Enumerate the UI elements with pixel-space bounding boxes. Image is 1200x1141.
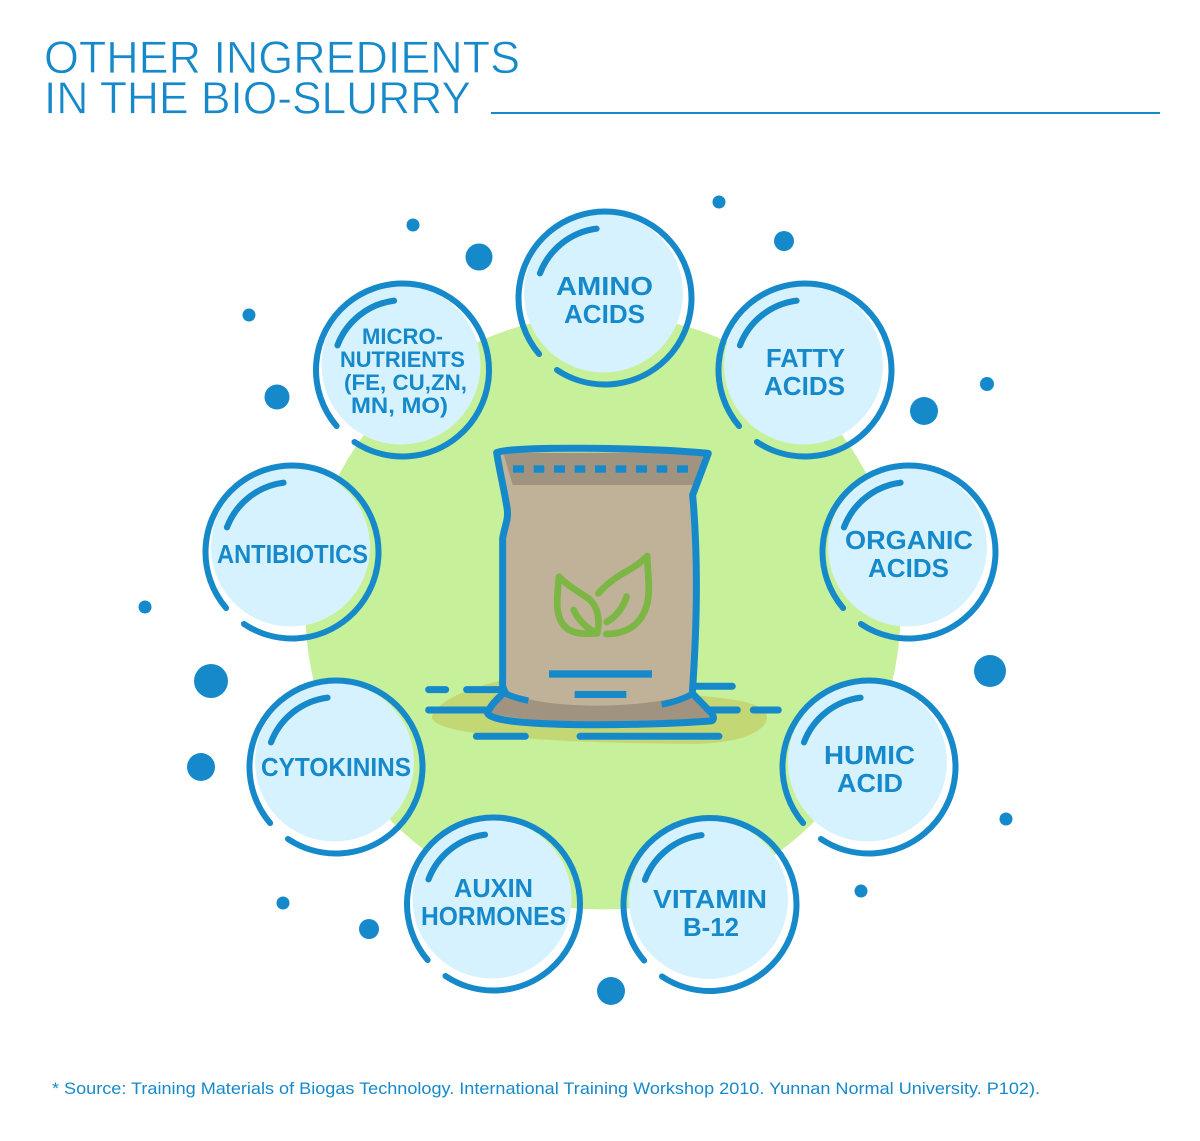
title: OTHER INGREDIENTS xyxy=(44,32,520,83)
bubble: antibiotics: ANTIBIOTICS xyxy=(217,539,368,569)
bubble: cytokinins: CYTOKININS xyxy=(261,752,411,782)
bubble: micronutrients: MN, MO) xyxy=(351,393,448,418)
bubble: vitamin b-12 xyxy=(588,783,832,1026)
bubble: amino acids xyxy=(483,176,727,420)
bag base xyxy=(488,693,712,723)
bubble: organic acids: ACIDS xyxy=(868,553,949,583)
title: IN THE BIO-SLURRY xyxy=(44,72,471,124)
bubble: auxin hormones: HORMONES xyxy=(421,901,566,931)
bubble: organic acids: ORGANIC xyxy=(845,525,973,555)
bag body xyxy=(497,453,708,706)
bubble: fatty acids: ACIDS xyxy=(764,371,845,401)
bubble: micronutrients: NUTRIENTS xyxy=(340,347,465,372)
green background circle xyxy=(306,314,900,910)
decorative dots xyxy=(138,196,1012,1005)
icon: fertilizer bag xyxy=(429,448,778,744)
bubble: vitamin b-12: B-12 xyxy=(683,912,739,942)
bubble: organic acids xyxy=(787,430,1031,674)
bubble: auxin hormones: AUXIN xyxy=(454,873,533,903)
bubble: antibiotics xyxy=(170,430,414,674)
ground shadow xyxy=(432,680,767,744)
bubble: humic acid xyxy=(747,645,991,889)
bag hem strokes xyxy=(505,693,692,705)
bag outline xyxy=(488,448,713,725)
bubble: micronutrients: MICRO- xyxy=(362,324,443,349)
bubble: vitamin b-12: VITAMIN xyxy=(653,884,767,914)
bubble: auxin hormones xyxy=(372,782,615,1026)
bubble: fatty acids xyxy=(683,248,927,492)
bag top band xyxy=(503,453,707,485)
bubble: cytokinins xyxy=(214,645,458,889)
bubble: amino acids: AMINO xyxy=(556,271,653,301)
bubble: micronutrients xyxy=(281,248,524,492)
bubble: micronutrients: (FE, CU,ZN, xyxy=(344,370,467,395)
title xyxy=(44,32,520,124)
ground lines xyxy=(429,686,778,736)
leaves xyxy=(557,556,649,634)
bubble: fatty acids: FATTY xyxy=(766,343,845,373)
bubble: humic acid: ACID xyxy=(837,768,903,798)
stitch marks xyxy=(513,465,688,698)
bubble: humic acid: HUMIC xyxy=(824,740,915,770)
bubble: amino acids: ACIDS xyxy=(564,299,645,329)
source note: * Source: Training Materials of Biogas Technology. International Training Workshop 2010. Yunnan Normal University. P102). xyxy=(52,1079,1040,1098)
